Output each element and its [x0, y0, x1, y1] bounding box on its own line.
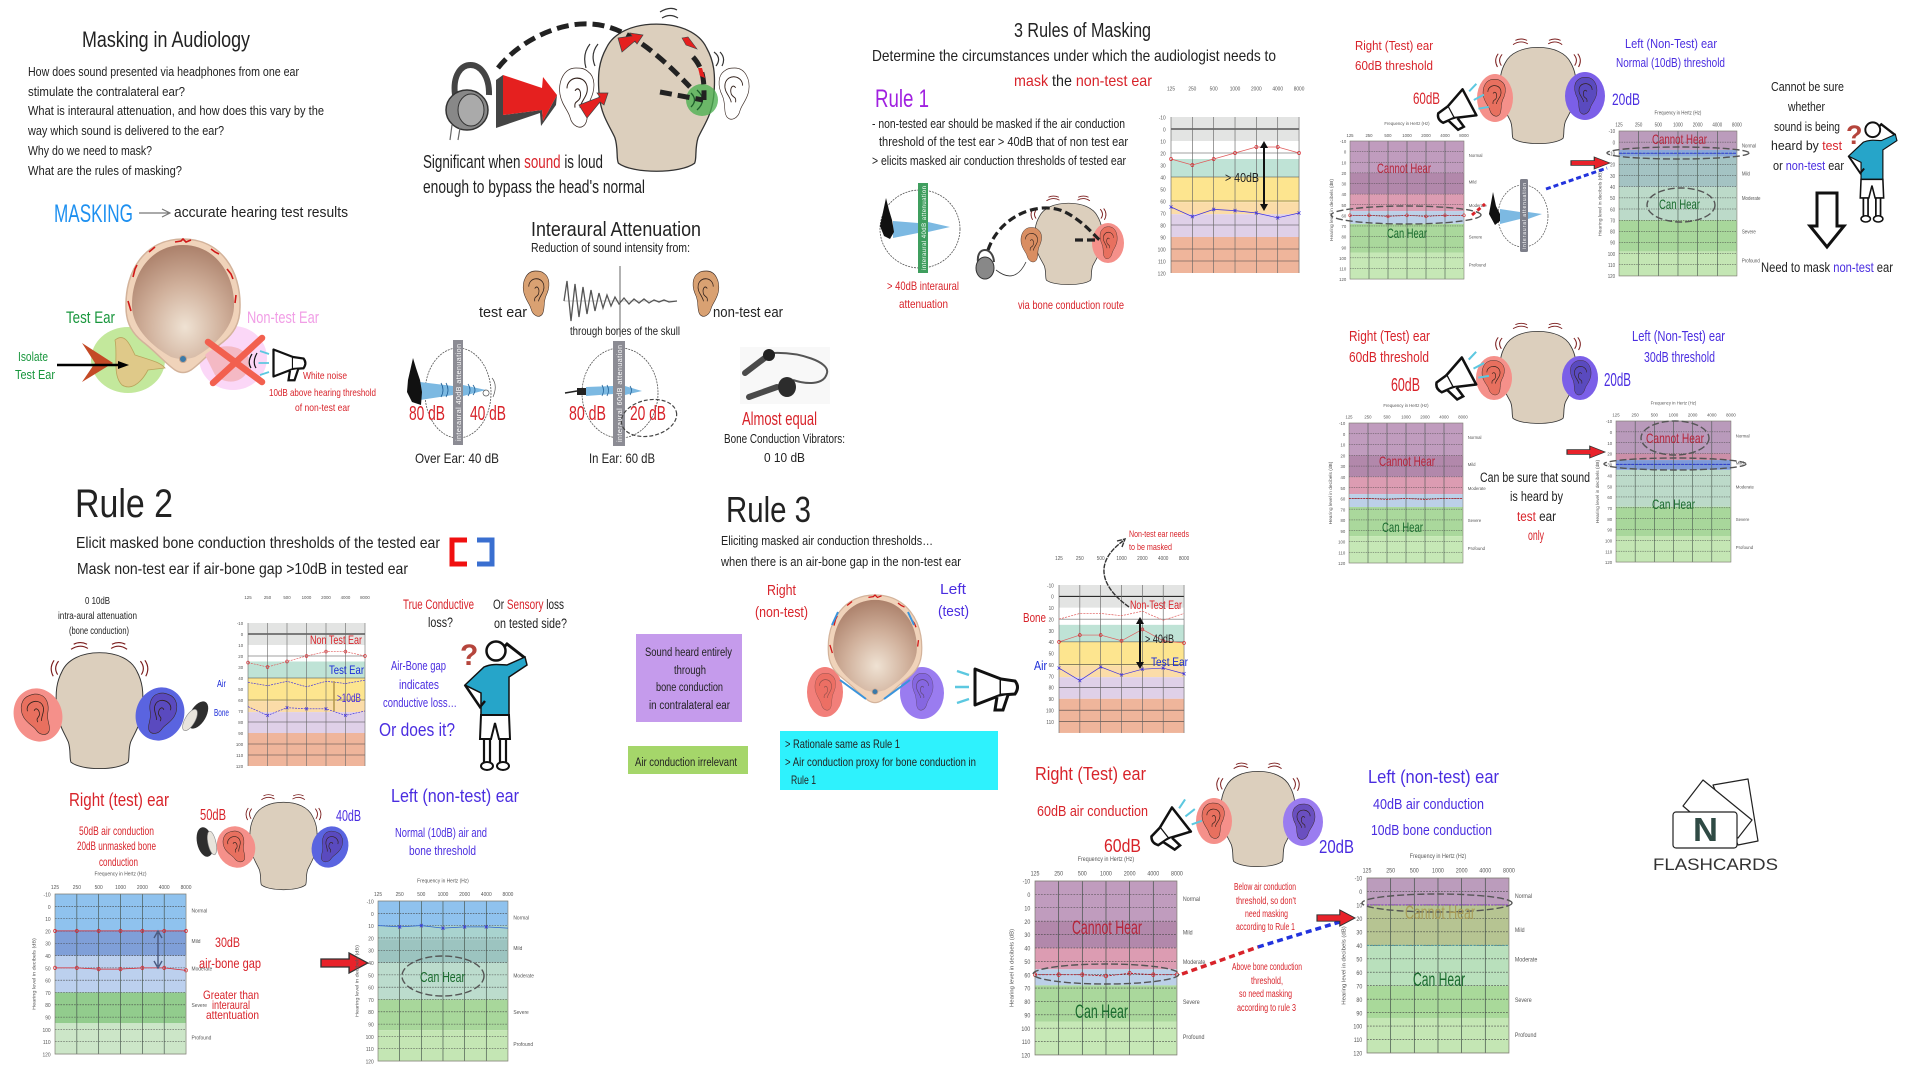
caption: bone conduction vibrators	[724, 409, 845, 465]
callout: sound heard entirely through bone conduction: in contralateral ear	[649, 700, 730, 712]
diagram: in-ear insert attenuation: 80 dB	[569, 403, 606, 425]
labels: right test ear 60dB air conduction: Right (Test) ear	[1035, 764, 1146, 784]
callout: sound heard entirely through bone conduction: Sound heard entirely	[645, 647, 732, 659]
note: non-test ear needs to be masked: to be masked	[1129, 542, 1172, 553]
intro questions text block: What are the rules of masking?	[28, 163, 182, 178]
chart: right ear audiogram second case: Cannot Hear	[1379, 453, 1435, 469]
diagram: rule 1 bone conduction route: via bone conduction route	[1018, 298, 1124, 312]
diagram: in-ear insert attenuation: interaural 60dB attenuation	[617, 345, 624, 442]
labels: right test ear 50dB: Right (test) ear	[69, 790, 169, 810]
rule 1 bullets: threshold of the test ear > 40dB that of non test ear	[879, 135, 1128, 149]
chart: left ear audiogram second case: Cannot Hear	[1646, 430, 1704, 446]
labels: left test	[938, 581, 969, 620]
diagram: rule 1 interaural attenuation: attenuation	[899, 297, 948, 311]
labels: right test ear 60dB threshold: Right (Test) ear	[1355, 38, 1434, 53]
white noise caption: White noise	[303, 370, 347, 382]
figure: head rule 3 lower	[1144, 763, 1323, 867]
chart: rule 2 audiogram: Bone	[214, 708, 229, 719]
masking heading with arrow	[54, 200, 348, 228]
rule 2 description	[76, 535, 441, 578]
logo: flashcards: FLASHCARDS	[1653, 855, 1778, 874]
labels: left non-test ear normal threshold: Normal (10dB) threshold	[1616, 55, 1725, 70]
icon: confused person rule 2: ?	[460, 639, 478, 672]
chart: rule 1 audiogram: > 40dB	[1225, 170, 1259, 185]
labels: left non-test ear normal threshold: Left (Non-Test) ear	[1625, 36, 1718, 51]
note: air-bone gap indicates conductive loss	[379, 658, 457, 740]
labels: left non-test ear normal	[391, 786, 519, 858]
labels: left non-test ear normal: Left (non-test) ear	[391, 786, 519, 806]
chart: rule 3 audiogram: Bone	[1023, 610, 1046, 625]
heading: 3 rules of masking	[872, 20, 1276, 90]
arrow: dotted red and blue link	[1182, 920, 1346, 974]
figure: 60dB right, 10dB left head	[1432, 39, 1605, 144]
note: above bone conduction threshold: so need masking	[1239, 989, 1292, 1000]
diagram: small interaural crossing: interaural attenuation	[1522, 183, 1528, 249]
callout: sound heard entirely through bone conduction: through	[674, 665, 706, 677]
heading: 3 rules of masking: mask the non-test ear	[1014, 73, 1153, 90]
note: intra-aural attenuation: 0 10dB	[85, 595, 110, 607]
chart: rule 2 audiogram: Air	[217, 679, 226, 690]
note: cannot be sure: or non-test ear	[1773, 158, 1845, 173]
labels: right test ear 50dB: 50dB air conduction	[79, 824, 154, 838]
caption: significant when sound is loud: enough to bypass the head's normal	[423, 177, 645, 197]
chart: rule 3 audiogram: Air	[1034, 658, 1048, 673]
white noise caption	[269, 370, 376, 414]
labels: left non-test ear second case: Left (Non-Test) ear	[1632, 328, 1725, 345]
diagram: over-ear headphone attenuation	[407, 340, 506, 466]
diagram: rule 1 interaural attenuation	[880, 183, 960, 311]
callout: rationale same as rule 1: Rule 1	[791, 773, 816, 787]
note: cannot be sure: whether	[1787, 99, 1826, 114]
heading: rule 3: Rule 3	[726, 489, 811, 530]
labels: right test ear second case: 60dB threshold	[1349, 349, 1429, 366]
note: cannot be sure: Cannot be sure	[1771, 79, 1844, 94]
diagram: in-ear insert attenuation: In Ear: 60 dB	[589, 450, 655, 466]
logo: flashcards	[1653, 779, 1778, 874]
labels: left non-test ear 40dB air conduction: Left (non-test) ear	[1368, 767, 1499, 787]
chart: rule 3 audiogram	[1023, 556, 1189, 733]
note: can be sure: test ear	[1517, 509, 1556, 524]
intro questions text block: What is interaural attenuation, and how does this vary by the	[28, 103, 324, 118]
note: above bone conduction threshold: according to rule 3	[1237, 1003, 1296, 1014]
chart: right ear audiogram rule 3	[1010, 857, 1205, 1060]
chart: rule 3 audiogram: > 40dB	[1145, 632, 1174, 646]
caption: bone conduction vibrators: Almost equal	[742, 409, 817, 429]
chart: left ear audiogram rule 3	[1342, 854, 1537, 1058]
chart: rule 1 audiogram: 120	[1158, 271, 1166, 278]
callout: air conduction irrelevant	[628, 746, 748, 774]
chart: rule 2 audiogram: 120	[236, 764, 243, 769]
labels: left non-test ear 40dB air conduction: 10dB bone conduction	[1371, 822, 1492, 839]
labels: 30dB air-bone gap: 30dB	[215, 934, 240, 950]
icon: confused person	[1846, 120, 1897, 222]
labels: 30dB air-bone gap: Greater than	[203, 988, 259, 1002]
heading: 3 rules of masking: Determine the circumstances under which the audiologist needs to	[872, 48, 1276, 65]
chart: right ear audiogram rule 3: Can Hear	[1075, 1002, 1128, 1023]
labels: 30dB air-bone gap: interaural	[212, 998, 250, 1012]
question: true conductive loss or sensory	[403, 597, 567, 631]
icon: bone conduction vibrator	[740, 347, 830, 404]
intro questions text block: way which sound is delivered to the ear?	[27, 123, 224, 138]
masking heading with arrow: accurate hearing test results	[174, 204, 348, 221]
diagram: skull with isolated test ear and masked non-test ear	[57, 239, 267, 393]
figure: head with vibrator on right ear: 50dB	[200, 807, 226, 824]
labels: right test ear second case	[1349, 328, 1430, 395]
labels: right test ear 60dB air conduction	[1035, 764, 1148, 856]
diagram: ears with decaying waveform	[479, 266, 783, 338]
note: below air conduction threshold: threshold, so don't	[1236, 896, 1296, 907]
caption: bone conduction vibrators: 0 10 dB	[764, 450, 805, 465]
diagram: over-ear headphone attenuation: interaural 40dB attenuation	[456, 344, 463, 441]
intro questions text block	[27, 64, 324, 178]
heading: rule 2: Rule 2	[75, 482, 173, 526]
labels: right test ear 50dB: 20dB unmasked bone	[77, 839, 156, 853]
icon: megaphone white noise	[258, 350, 305, 380]
chart: right ear audiogram rule 3: Cannot Hear	[1072, 918, 1142, 939]
figure: head with vibrator on right ear	[194, 795, 361, 890]
labels: right test ear second case: 60dB	[1391, 375, 1420, 395]
note: air-bone gap indicates conductive loss: conductive loss…	[383, 695, 457, 710]
labels: right test ear 60dB threshold	[1355, 38, 1440, 108]
note: intra-aural attenuation	[58, 595, 137, 637]
arrow: red to left ear audiogram second case	[1567, 446, 1605, 458]
rule 1 heading: Rule 1	[875, 85, 929, 113]
masking heading with arrow: MASKING	[54, 200, 133, 228]
chart: rule 2 audiogram: Test Ear	[329, 663, 364, 677]
chart: rule 3 audiogram: Test Ear	[1151, 655, 1188, 669]
labels: right test ear 60dB air conduction: 60dB	[1104, 836, 1141, 856]
icon: red and blue brackets	[452, 540, 492, 564]
diagram: skull with both ears and megaphone	[807, 595, 1018, 719]
labels: left non-test ear second case: 20dB	[1604, 370, 1631, 390]
labels: left test: (test)	[938, 603, 969, 620]
labels: 30dB air-bone gap: air-bone gap	[199, 955, 261, 971]
labels: 30dB air-bone gap	[199, 934, 261, 1022]
labels: left non-test ear 40dB air conduction: 20dB	[1319, 837, 1354, 857]
diagram: rule 1 interaural attenuation: interaural 40dB attenuation	[922, 186, 928, 270]
chart: right ear audiogram cannot hear / can hear: Can Hear	[1387, 225, 1427, 241]
icon: confused person rule 2	[460, 639, 527, 770]
arrow: down	[1810, 193, 1844, 247]
labels: right test ear 60dB threshold: 60dB threshold	[1355, 58, 1433, 73]
callout: rationale same as rule 1	[780, 731, 998, 790]
arrow: red to left ear audiogram	[1571, 157, 1610, 169]
diagram: over-ear headphone attenuation: 80 dB	[409, 403, 445, 425]
arrow: red to left ear audiogram rule 2	[321, 953, 368, 973]
note: below air conduction threshold: according to Rule 1	[1236, 922, 1295, 933]
figure: 60dB right, 30dB left head	[1430, 323, 1598, 423]
note: air-bone gap indicates conductive loss: Or does it?	[379, 720, 455, 740]
labels: left non-test ear normal: bone threshold	[409, 843, 476, 858]
chart: rule 2 audiogram: >10dB	[337, 691, 361, 705]
caption: significant when sound is loud: Significant when sound is loud	[423, 152, 603, 172]
figure: head with vibrator on right ear: 40dB	[336, 808, 361, 825]
note: non-test ear needs to be masked	[1129, 529, 1189, 553]
note: above bone conduction threshold: threshold,	[1251, 976, 1283, 987]
chart: left ear audiogram second case	[1595, 400, 1754, 565]
diagram: rule 1 interaural attenuation: > 40dB interaural	[887, 279, 959, 293]
arrow: red to left ear audiogram rule 3	[1317, 910, 1355, 926]
labels: right test ear 50dB	[69, 790, 169, 869]
diagram: over-ear headphone attenuation: Over Ear: 40 dB	[415, 450, 499, 466]
heading: 3 rules of masking: 3 Rules of Masking	[1014, 20, 1151, 42]
white noise caption: of non-test ear	[295, 402, 350, 414]
title: Masking in Audiology: Masking in Audiology	[82, 27, 250, 52]
chart: left ear audiogram rule 3: Cannot Hear	[1405, 903, 1475, 924]
note: non-test ear needs to be masked: Non-test ear needs	[1129, 529, 1189, 540]
diagram: in-ear insert attenuation	[565, 341, 680, 466]
label: non-test ear: Non-test Ear	[247, 308, 319, 327]
chart: rule 3 audiogram: Non-Test Ear	[1130, 598, 1182, 612]
intro questions text block: Why do we need to mask?	[28, 143, 152, 158]
callout: air conduction irrelevant: Air conduction irrelevant	[635, 757, 738, 769]
label: test ear: Test Ear	[66, 308, 115, 327]
intro questions text block: How does sound presented via headphones from one ear	[28, 64, 300, 79]
rule 3 description: when there is an air-bone gap in the non-test ear	[720, 555, 961, 569]
rule 1 bullets: - non-tested ear should be masked if the air conduction	[872, 117, 1125, 131]
labels: right test ear 50dB: conduction	[99, 855, 138, 869]
labels: 30dB air-bone gap: attentuation	[206, 1008, 259, 1022]
labels: left non-test ear normal threshold: 20dB	[1612, 90, 1640, 109]
caption: significant when sound is loud	[423, 152, 645, 197]
label: isolate test ear	[15, 349, 56, 382]
labels: right test ear second case: Right (Test) ear	[1349, 328, 1430, 345]
caption: bone conduction vibrators: Bone Conduction Vibrators:	[724, 431, 845, 446]
chart: left ear audiogram rule 2: Can Hear	[420, 969, 465, 986]
labels: left non-test ear second case: 30dB threshold	[1644, 349, 1715, 366]
chart: rule 2 audiogram: Non Test Ear	[310, 633, 362, 647]
note: can be sure: only	[1528, 528, 1544, 543]
labels: right non-test: (non-test)	[755, 604, 808, 621]
logo: flashcards: N	[1693, 811, 1718, 848]
diagram: in-ear insert attenuation: 20 dB	[630, 403, 666, 425]
chart: right ear audiogram cannot hear / can hear: Cannot Hear	[1377, 160, 1431, 176]
labels: right test ear 60dB air conduction: 60dB air conduction	[1037, 803, 1148, 820]
diagram: ears with decaying waveform: test ear	[479, 304, 527, 321]
chart: rule 1 audiogram	[1158, 86, 1305, 278]
diagram: rule 1 bone conduction route	[976, 196, 1124, 312]
diagram: ears with decaying waveform: non-test ear	[713, 304, 783, 321]
chart: left ear audiogram rule 3: Can Hear	[1413, 970, 1465, 991]
chart: right ear audiogram second case	[1328, 403, 1486, 566]
chart: left ear audiogram: Can Hear	[1659, 196, 1700, 212]
chart: right ear audiogram cannot hear / can hear	[1329, 121, 1487, 282]
heading: interaural attenuation	[531, 219, 701, 255]
note: below air conduction threshold: Below air conduction	[1234, 882, 1296, 893]
question: true conductive loss or sensory: Or Sensory loss	[493, 597, 564, 612]
diagram: small interaural crossing	[1472, 168, 1607, 252]
note: intra-aural attenuation: intra-aural attenuation	[58, 610, 137, 622]
note: cannot be sure	[1771, 79, 1845, 173]
label: isolate test ear: Isolate	[18, 349, 48, 364]
diagram: ears with decaying waveform: through bones of the skull	[570, 324, 680, 338]
chart: left ear audiogram: Cannot Hear	[1652, 131, 1707, 147]
rule 3 description: Eliciting masked air conduction thresholds…	[721, 534, 933, 548]
note: air-bone gap indicates conductive loss: indicates	[399, 677, 439, 692]
labels: right test ear 60dB threshold: 60dB	[1413, 89, 1440, 108]
note: above bone conduction threshold	[1232, 962, 1302, 1014]
question: true conductive loss or sensory: on tested side?	[494, 616, 567, 631]
note: below air conduction threshold: need masking	[1245, 909, 1288, 920]
note: can be sure: Can be sure that sound	[1480, 470, 1590, 485]
chart: left ear audiogram second case: Can Hear	[1652, 496, 1695, 512]
labels: left non-test ear 40dB air conduction	[1319, 767, 1499, 857]
diagram: headphones sound crossing the head	[446, 8, 749, 171]
labels: left non-test ear second case	[1604, 328, 1725, 390]
note: below air conduction threshold	[1234, 882, 1296, 933]
rule 1 bullets: > elicits masked air conduction thresholds of tested ear	[872, 154, 1126, 168]
figure: head with bone vibrator	[6, 643, 212, 769]
rule 3 description	[720, 534, 961, 569]
callout: rationale same as rule 1: > Air conduction proxy for bone conduction in	[785, 755, 976, 769]
arrow: curved to non-test ear note	[1104, 539, 1129, 607]
diagram: over-ear headphone attenuation: 40 dB	[470, 403, 506, 425]
labels: left non-test ear normal: Normal (10dB) air and	[395, 825, 487, 840]
rule 2 description: Mask non-test ear if air-bone gap >10dB in tested ear	[77, 561, 409, 578]
note: intra-aural attenuation: (bone conduction)	[69, 625, 129, 637]
callout: sound heard entirely through bone conduction: bone conduction	[656, 682, 723, 694]
heading: interaural attenuation: Interaural Attenuation	[531, 219, 701, 241]
labels: right non-test: Right	[767, 582, 797, 599]
intro questions text block: stimulate the contralateral ear?	[28, 84, 185, 99]
note: air-bone gap indicates conductive loss: Air-Bone gap	[391, 658, 446, 673]
labels: left non-test ear 40dB air conduction: 40dB air conduction	[1373, 796, 1484, 813]
labels: left test: Left	[940, 581, 967, 598]
chart: rule 2 audiogram	[214, 595, 370, 769]
note: can be sure	[1480, 470, 1590, 543]
chart: left ear audiogram	[1598, 110, 1761, 280]
chart: right ear audiogram second case: Can Hear	[1382, 519, 1423, 535]
labels: right non-test	[755, 582, 808, 621]
question: true conductive loss or sensory: True Conductive	[403, 597, 474, 612]
note: above bone conduction threshold: Above bone conduction	[1232, 962, 1302, 973]
callout: rationale same as rule 1: > Rationale same as Rule 1	[785, 737, 900, 751]
note: need to mask non-test ear: Need to mask non-test ear	[1761, 259, 1893, 275]
rule 1 bullets	[872, 117, 1128, 168]
chart: right ear audiogram air-bone gap	[32, 871, 212, 1059]
note: cannot be sure: sound is being	[1774, 119, 1840, 134]
note: cannot be sure: heard by test	[1771, 138, 1842, 153]
labels: left non-test ear normal threshold	[1612, 36, 1725, 109]
rule 2 description: Elicit masked bone conduction thresholds of the tested ear	[76, 535, 441, 552]
white noise caption: 10dB above hearing threshold	[269, 387, 376, 399]
chart: left ear audiogram rule 2	[355, 878, 534, 1066]
label: isolate test ear: Test Ear	[15, 367, 56, 382]
heading: interaural attenuation: Reduction of sound intensity from:	[531, 240, 690, 255]
note: can be sure: is heard by	[1510, 489, 1563, 504]
question: true conductive loss or sensory: loss?	[428, 615, 453, 630]
icon: confused person: ?	[1846, 120, 1862, 150]
callout: sound heard entirely through bone conduction	[636, 634, 742, 722]
